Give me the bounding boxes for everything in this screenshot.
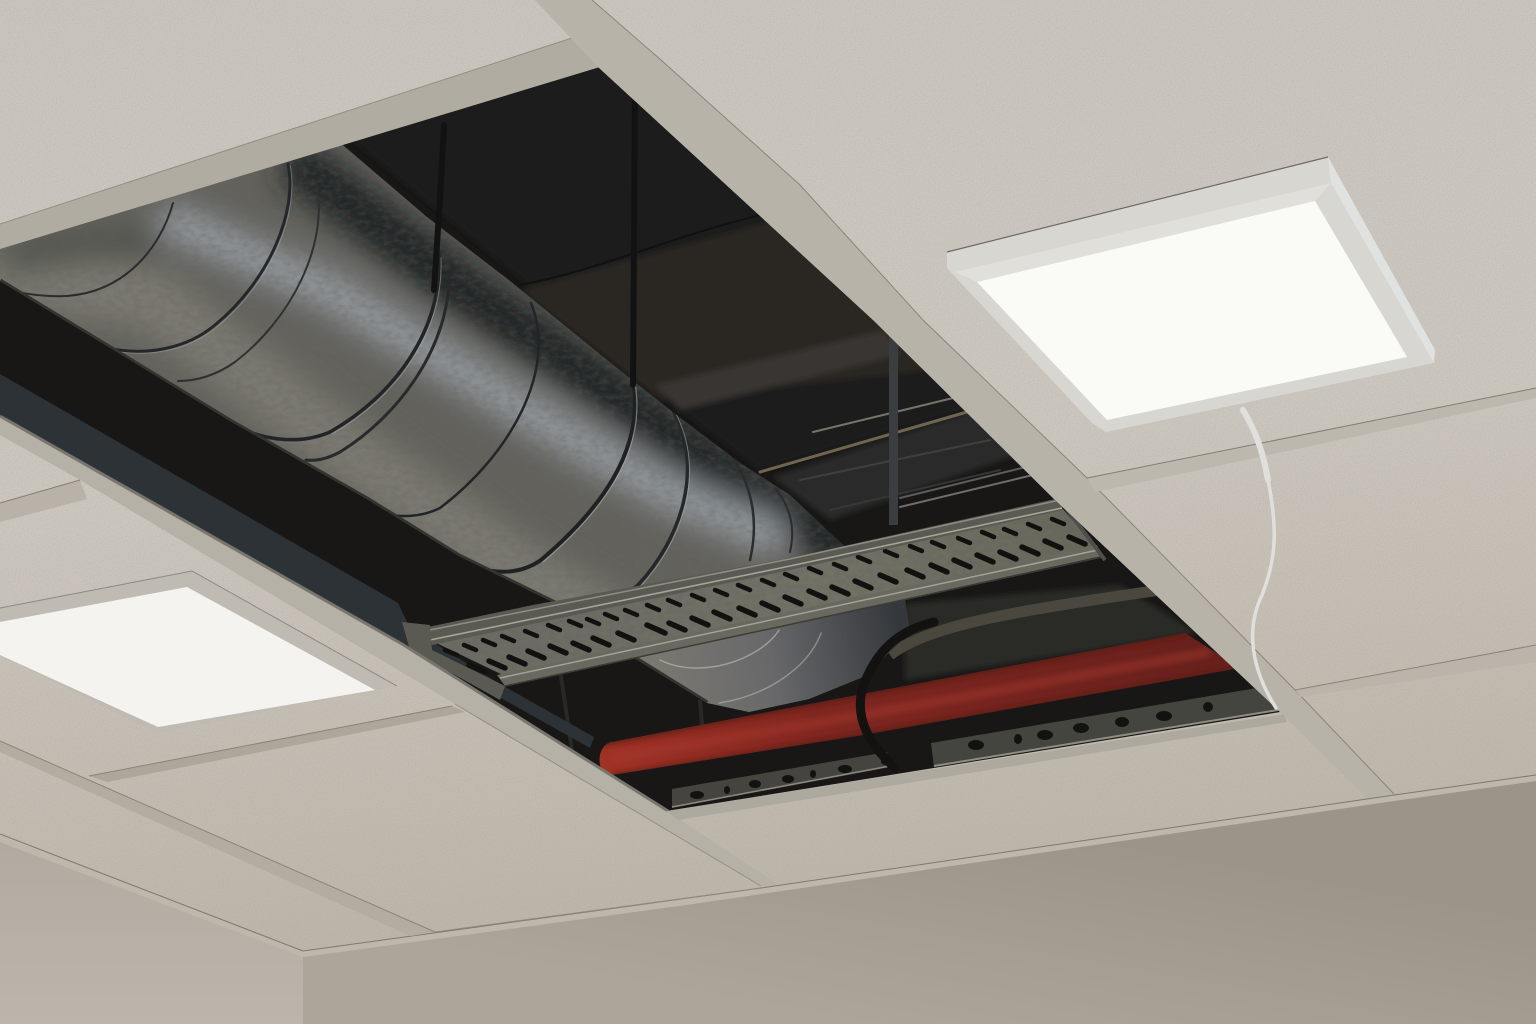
perforated channel: right [931,688,1278,767]
threaded rod [889,335,898,525]
right wall [303,781,1536,1024]
left light panel [0,571,397,733]
fixture bevel [955,183,1331,282]
concrete slab [523,68,1011,520]
tray lower lip [497,545,1102,686]
duct metal texture [72,154,842,591]
ceiling opening with services [0,50,1300,830]
black cable [860,622,934,768]
hanging wires [434,90,635,385]
duct tail below tray [643,600,909,712]
perforated channel: left [672,752,890,808]
tray upper lip [428,498,1063,645]
lower left diagonal bar [0,741,435,936]
left cross bar [0,480,87,522]
lower centre tile divider [435,888,761,932]
lower void structure [559,585,1193,750]
lower left strip [0,416,779,886]
red sprinkler pipe [600,633,1234,775]
far metal slats [760,398,1033,510]
dark steel beam [0,374,594,748]
fixture side face [1328,157,1435,363]
duct lower lip [0,281,707,703]
duct seams [5,164,821,703]
tray slots [445,519,1085,672]
left wall [0,842,303,1024]
tray end bracket [402,622,505,700]
right light fixture [947,157,1435,432]
main strip edge line [592,0,1394,794]
spiral duct [0,130,920,730]
wall trim [0,775,1536,957]
top ceiling trim [0,38,600,249]
white power cable [1243,410,1276,708]
cable tray [402,498,1105,700]
void background [0,50,1300,830]
duct shading [0,170,840,645]
right upper cross bar [1087,388,1536,492]
left lit diffuser [0,587,375,727]
main grid strip [535,0,1394,798]
tray texture [425,500,1105,680]
lower cross bar [89,706,465,782]
bottom opening frame [666,714,1287,820]
right lower cross bar [1295,645,1536,697]
lit diffuser [977,201,1407,420]
